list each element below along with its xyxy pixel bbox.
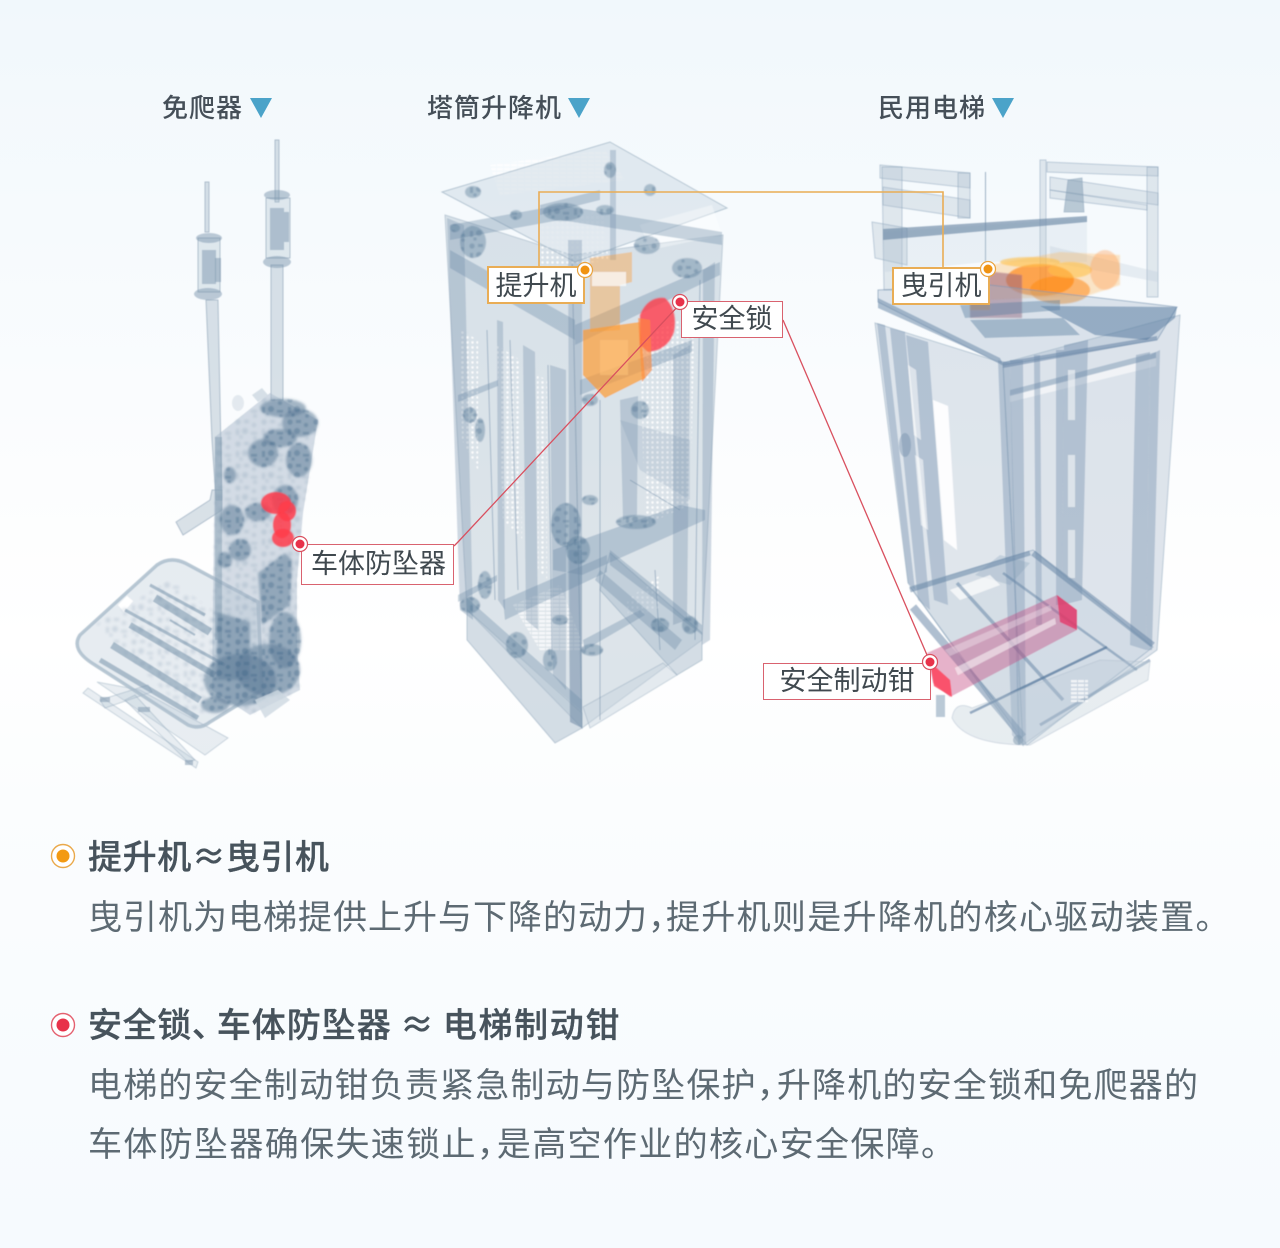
- platform rails: [100, 585, 225, 718]
- body faces: [445, 215, 582, 728]
- heading: passenger elevator: 民用电梯: [878, 93, 986, 123]
- label: anti-fall device: [301, 544, 454, 585]
- columns: [447, 150, 715, 728]
- perforated panels: [460, 330, 478, 470]
- text heading: safety devices vs safety gear: 、: [192, 998, 226, 1047]
- label: safety lock: 安全锁: [692, 304, 772, 334]
- triangle marker: [250, 98, 272, 118]
- text block: safety description line two: ，: [477, 1126, 512, 1164]
- label: hoist: [487, 266, 585, 304]
- dark machinery clusters: [201, 399, 318, 713]
- text block: safety description line one: ，: [757, 1067, 792, 1105]
- text block: safety description line one: 电梯的安全制动钳负责紧急制动与防坠保护 升降机的安全锁和免爬器的: [88, 1067, 1199, 1105]
- triangle marker: [568, 98, 590, 118]
- dot: safety gear: [922, 654, 938, 670]
- text heading: hoist vs traction machine: ≈: [192, 830, 226, 879]
- upper frames: [872, 160, 1158, 297]
- label: traction machine: [892, 267, 990, 305]
- dot: safety lock: [672, 294, 688, 310]
- base feet: [467, 610, 582, 743]
- beams: [450, 190, 722, 712]
- brake at side: [899, 433, 911, 457]
- label: safety gear: [763, 663, 931, 700]
- highlight: hoist: [583, 252, 645, 398]
- top lid: [442, 142, 727, 262]
- rods: [176, 140, 290, 535]
- dark brackets: [450, 162, 702, 671]
- label: safety gear: 安全制动钳: [780, 666, 914, 696]
- label: hoist: 提升机: [496, 271, 576, 301]
- machine: climb-free device: [77, 140, 318, 768]
- machine: tower lift: [442, 142, 727, 743]
- highlight: safety gear: [927, 595, 1077, 697]
- label: traction machine: 曳引机: [900, 271, 982, 301]
- cabin faces: [875, 323, 1023, 745]
- label: anti-fall device: 车体防坠器: [311, 549, 446, 579]
- text block: safety description line two: 车体防坠器确保失速锁止 是高空作业的核心安全保障。: [88, 1126, 956, 1164]
- connector: hoist to traction machine: [539, 192, 943, 268]
- body block: [212, 393, 318, 715]
- dot: anti-fall device: [292, 536, 308, 552]
- thin edges: [487, 280, 700, 720]
- legend icon: orange: [52, 844, 74, 868]
- text block: traction machine description: ，: [648, 899, 683, 937]
- text heading: hoist vs traction machine: 提升机 曳引机: [88, 830, 330, 879]
- dot: hoist: [578, 262, 592, 278]
- text block: traction machine description: 曳引机为电梯提供上升与下降的动力 提升机则是升降机的核心驱动装置。: [88, 899, 1231, 937]
- machine: passenger elevator: [872, 160, 1180, 745]
- lower base: [952, 660, 1150, 745]
- highlight: anti-fall device: [261, 492, 296, 547]
- connector: anti-fall device to safety lock: [454, 304, 680, 546]
- heading: tower lift: 塔筒升降机: [427, 93, 562, 123]
- roof platform: [878, 285, 1177, 365]
- text heading: safety devices vs safety gear: 安全锁 车体防坠器 ≈ 电梯制动钳: [88, 998, 621, 1047]
- legend icon: red: [52, 1014, 74, 1036]
- highlight: traction motor: [970, 250, 1120, 318]
- columns and rails: [877, 323, 1160, 745]
- connector: safety lock to safety gear: [783, 320, 930, 662]
- dot: traction machine: [980, 262, 996, 276]
- heading: climb-free device: 免爬器: [162, 93, 243, 123]
- cabin window: [933, 400, 957, 550]
- roof box: [883, 218, 1087, 272]
- floor frame: [910, 550, 1153, 745]
- platform: [77, 560, 262, 727]
- roof beam: [883, 216, 1087, 240]
- scissor legs: [83, 682, 228, 768]
- triangle marker: [992, 98, 1014, 118]
- highlight: safety lock: [640, 298, 675, 352]
- label: safety lock: [681, 301, 783, 338]
